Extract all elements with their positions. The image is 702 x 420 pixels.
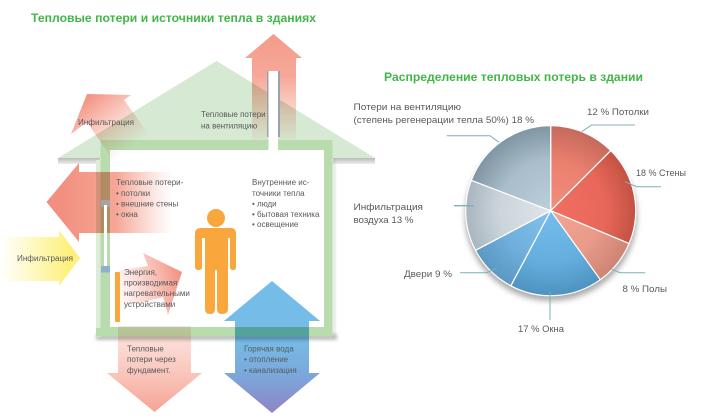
arrow: hot water two-way [224,281,320,413]
label: yellow infiltration: Инфильтрация [17,254,73,263]
label: upper infiltration: Инфильтрация [78,118,134,127]
label: internal sources: • освещение [252,220,299,229]
label: ventilation loss: Тепловые потери [201,110,266,119]
label: foundation loss: фундамент. [127,366,170,375]
heating device bar [115,272,120,322]
label: hot water: • канализация [244,366,297,375]
label: ventilation 18%: Потери на вентиляцию [354,102,461,113]
arrow: yellow infiltration [0,230,80,286]
label: internal sources: • люди [252,200,277,208]
label: ventilation loss: на вентиляцию [201,122,257,130]
arrow: upper infiltration [71,94,150,163]
label: foundation loss: Тепловые [127,344,164,354]
slice: ventilation 18% [471,126,551,211]
label: walls: 18 % Стены [636,168,686,179]
arrow: ventilation heat loss [245,34,302,140]
label: internal sources: • бытовая техника [252,210,320,219]
label: air infiltration: воздуха 13 % [354,215,414,226]
arrow: heating device energy [120,253,182,315]
leader lines [447,125,661,320]
chimney [267,71,280,150]
slice: walls 18% [551,151,636,244]
labels: pie chart [354,102,686,335]
label: heating energy: Энергия, [124,268,157,277]
label: wall losses: • потолки [116,189,150,198]
label: wall losses: • окна [116,210,138,219]
label: heating energy: производимая [124,278,177,288]
slice: air infiltration 13% [466,180,551,250]
label: hot water: • отопление [244,355,289,364]
slice: floors 8% [551,211,629,280]
label: internal sources: точники тепла [252,189,305,198]
slice: windows 17% [511,211,600,296]
icon: person [195,209,236,314]
house: roof and walls [58,61,375,340]
arrow: heat loss through walls [46,163,172,242]
heading: pie chart: Распределение тепловых потерь в здании [384,70,643,84]
pie chart [465,126,637,301]
wall pipe [101,200,110,272]
label: foundation loss: потери через [127,355,176,364]
label: internal sources: Внутренние ис- [252,178,310,187]
label: doors: Двери 9 % [404,269,453,280]
label: windows: 17 % Окна [518,324,565,335]
label: wall losses: Тепловые потери- [116,178,184,187]
label: floors: 8 % Полы [622,284,667,295]
label: ventilation 18%: (степень регенерации тепла 50%) 18 % [354,115,535,126]
slice: ceilings 12% [551,126,611,211]
label: heating energy: устройствами [124,300,175,309]
label: air infiltration: Инфильтрация [354,202,423,213]
label: ceilings: 12 % Потолки [587,107,649,118]
title: heat losses and sources: Тепловые потери и источники тепла в зданиях [31,11,316,25]
label: wall losses: • внешние стены [116,200,179,208]
slice: doors 9% [476,211,551,286]
arrow: foundation heat loss [107,326,202,412]
labels: house diagram [17,110,320,375]
label: heating energy: нагревательными [124,289,190,298]
label: hot water: Горячая вода [244,344,294,354]
